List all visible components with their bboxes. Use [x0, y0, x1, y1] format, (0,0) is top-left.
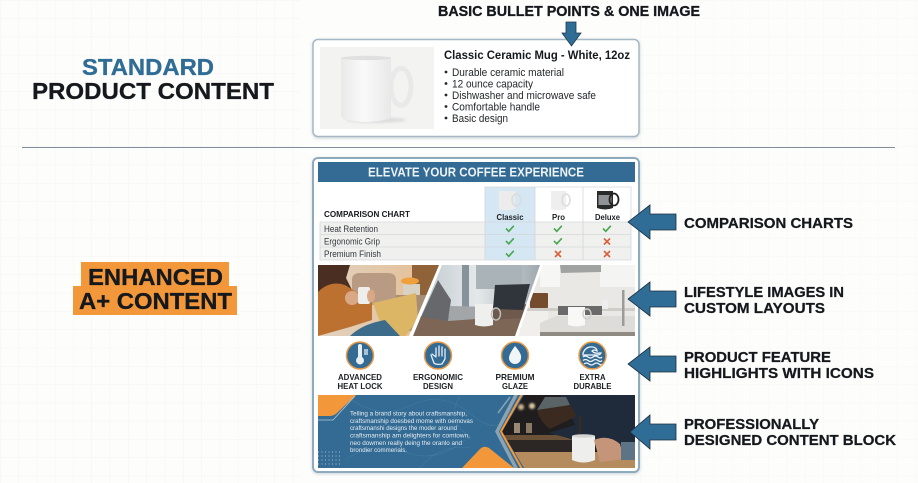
- topographic line texture: [345, 396, 512, 468]
- label: lifestyle images: LIFESTYLE IMAGES IN: [684, 285, 844, 301]
- photo: pouring coffee into mug: [500, 395, 636, 468]
- brand story text: neo dowmen really deing the oranlo and: [350, 440, 462, 447]
- feature: advanced heat lock: [338, 342, 383, 391]
- label: product feature highlights: PRODUCT FEATURE: [684, 350, 831, 366]
- photo: white kitchen with mug: [515, 265, 637, 336]
- orange corner shape: [318, 395, 356, 416]
- feature: extra durable: EXTRA: [580, 373, 606, 382]
- bullet list: Basic design: [452, 113, 508, 125]
- comparison chart: COMPARISON CHART: [324, 209, 411, 219]
- brand story text: craftsmanshi designs the moder around: [350, 425, 457, 432]
- bullet list: 12 ounce capacity: [452, 78, 533, 90]
- feature: premium glaze: GLAZE: [502, 382, 529, 391]
- brand story text: craftsmanship doesbed mome with oemovas: [350, 418, 474, 425]
- label: professionally designed content block: DESIGNED CONTENT BLOCK: [684, 433, 897, 449]
- chevrons: [497, 393, 517, 470]
- heading: standard product content: [32, 54, 274, 104]
- arrow: to feature icons: [628, 347, 676, 381]
- label: product feature highlights: [684, 350, 874, 382]
- image: plain white mug: [320, 47, 434, 129]
- photo: woman with mug on sofa: [318, 265, 443, 336]
- arrow: down to standard card: [562, 22, 581, 46]
- bullet list: Comfortable handle: [452, 102, 540, 114]
- panel: enhanced A+ card: [313, 158, 639, 472]
- label: lifestyle images: CUSTOM LAYOUTS: [684, 301, 825, 317]
- feature icons row: [338, 342, 612, 391]
- feature: extra durable: [574, 342, 612, 391]
- column heads with mugs: Deluxe: [595, 213, 621, 222]
- column heads with mugs: Classic: [496, 213, 524, 222]
- photo: laptop and mug on desk: [410, 265, 545, 336]
- heading: enhanced A+ content: ENHANCED: [88, 264, 223, 290]
- heading: standard product content: STANDARD: [82, 54, 214, 80]
- brand story text: [350, 410, 474, 454]
- bullet list: Durable ceramic material: [452, 67, 564, 79]
- brand story text: craftsmanship am delighters for comtown,: [350, 432, 470, 440]
- bullet list: Dishwasher and microwave safe: [452, 90, 596, 102]
- feature: premium glaze: PREMIUM: [496, 373, 535, 382]
- label: product feature highlights: HIGHLIGHTS WITH ICONS: [684, 366, 874, 382]
- column heads with mugs: [496, 191, 621, 222]
- label: comparison charts: COMPARISON CHARTS: [684, 216, 853, 232]
- check and cross marks: [506, 226, 611, 257]
- designed content block: [318, 393, 636, 470]
- heading: enhanced A+ content: A+ CONTENT: [79, 288, 232, 314]
- row labels: Heat Retention: [324, 224, 378, 234]
- lifestyle images: [318, 265, 637, 336]
- row labels: Premium Finish: [324, 249, 381, 259]
- row labels: [324, 224, 381, 259]
- arrow: to lifestyle images: [628, 282, 676, 316]
- feature: ergonomic design: ERGONOMIC: [413, 373, 463, 382]
- brand story text: Telling a brand story about craftsmanship,: [350, 410, 467, 418]
- banner heading: [318, 162, 635, 182]
- feature: ergonomic design: DESIGN: [423, 382, 453, 391]
- heading: basic bullet points and one image: BASIC BULLET POINTS & ONE IMAGE: [438, 4, 700, 20]
- label: lifestyle images: [684, 285, 844, 317]
- feature: extra durable: DURABLE: [574, 382, 612, 391]
- row labels: Ergonomic Grip: [324, 236, 380, 246]
- feature: premium glaze: [496, 342, 535, 391]
- brand story text: brondier commerials.: [350, 447, 407, 454]
- arrow: to comparison chart: [628, 205, 676, 239]
- feature: advanced heat lock: ADVANCED: [338, 373, 382, 382]
- comparison chart: [320, 187, 631, 260]
- dot pattern: [318, 452, 340, 464]
- feature: advanced heat lock: HEAT LOCK: [338, 382, 383, 391]
- arrow: to content block: [630, 415, 676, 449]
- product title: Classic Ceramic Mug - White, 12oz: [444, 48, 630, 62]
- orange bottom triangle: [462, 447, 514, 468]
- column heads with mugs: Pro: [552, 213, 565, 222]
- panel: standard product card: [313, 40, 639, 136]
- label: professionally designed content block: PROFESSIONALLY: [684, 417, 819, 433]
- feature: ergonomic design: [413, 342, 463, 391]
- label: professionally designed content block: [684, 417, 897, 449]
- heading: enhanced A+ content: [73, 262, 237, 315]
- bullet list: [445, 67, 596, 125]
- heading: standard product content: PRODUCT CONTENT: [32, 78, 274, 104]
- banner heading: ELEVATE YOUR COFFEE EXPERIENCE: [368, 166, 584, 180]
